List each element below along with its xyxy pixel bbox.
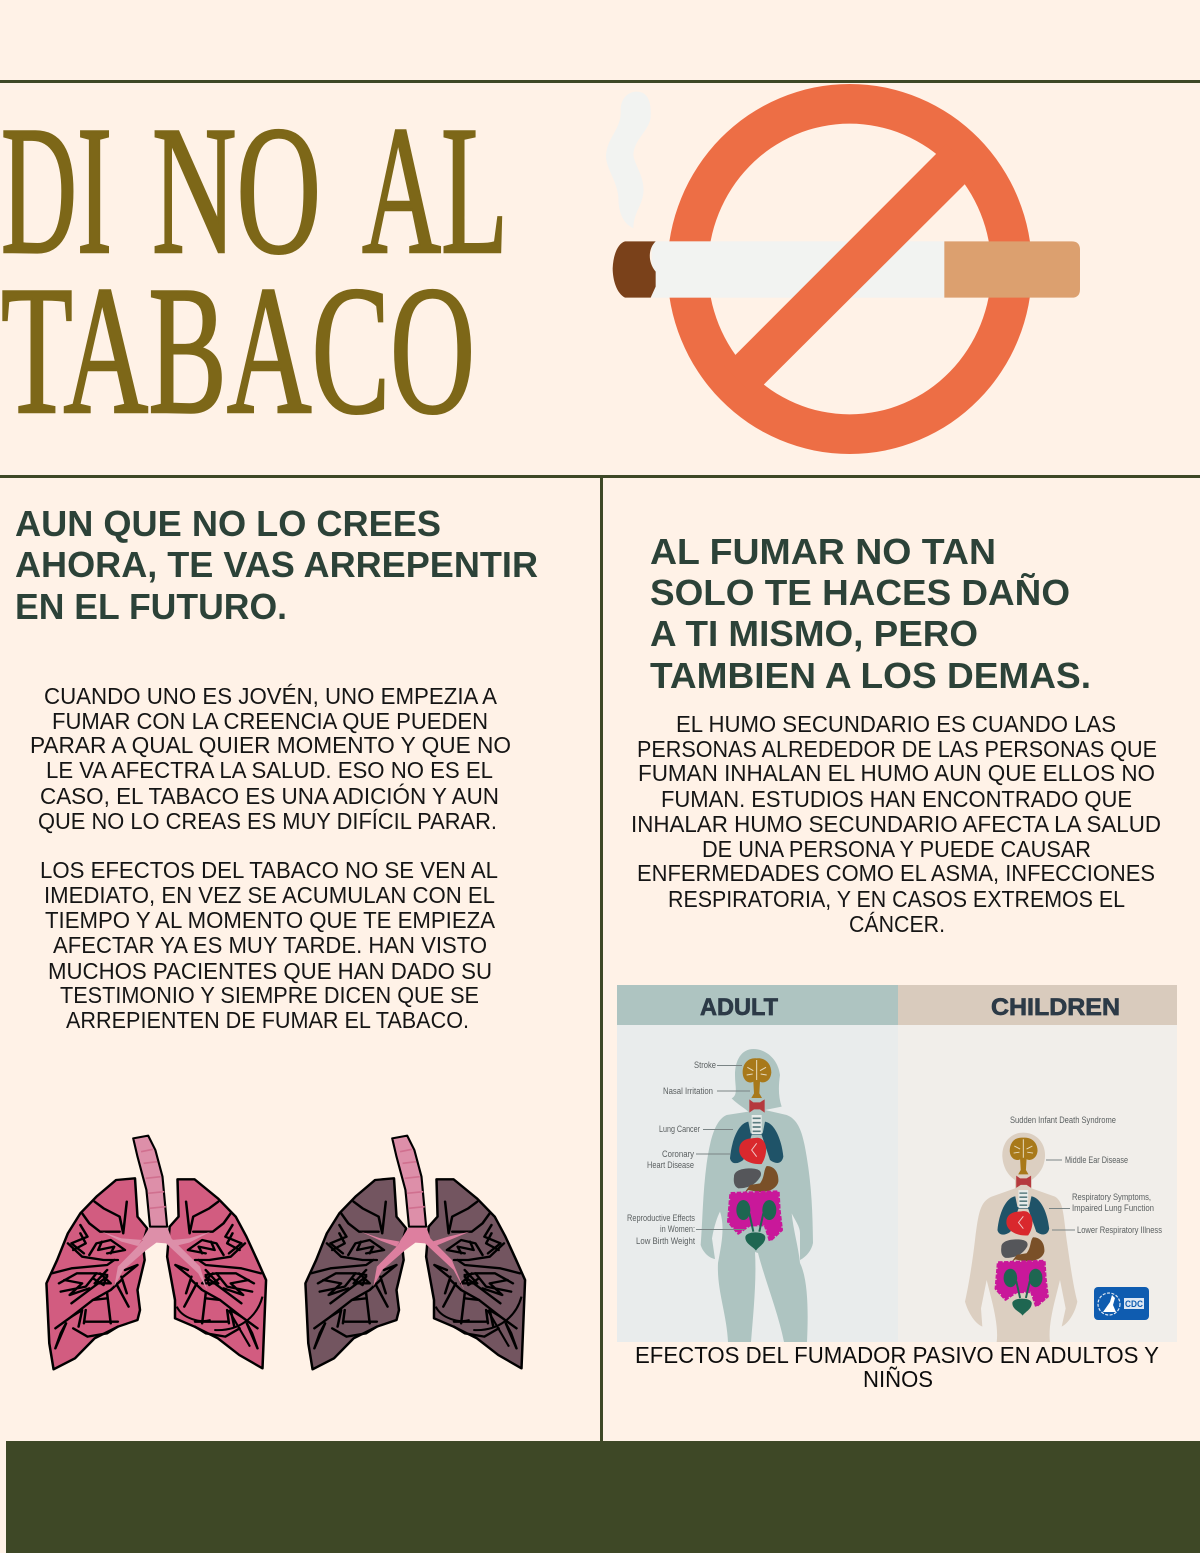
text block: second paragraph: AFECTAR YA ES MUY TARDE. HAN VISTO <box>53 932 487 958</box>
title <box>1 88 508 452</box>
icon: cigarette filter <box>944 241 1080 298</box>
chart: adult panel <box>617 985 898 1342</box>
trachea <box>133 1136 167 1227</box>
children panel title: CHILDREN <box>991 994 1120 1021</box>
text block: first paragraph: CUANDO UNO ES JOVÉN, UNO EMPEZIA A <box>44 683 498 709</box>
text block: first paragraph: FUMAR CON LA CREENCIA QUE PUEDEN <box>52 708 488 734</box>
heading: left column: AHORA, TE VAS ARREPENTIR <box>15 544 538 585</box>
text block: second-hand smoke: ENFERMEDADES COMO EL ASMA, INFECCIONES <box>637 860 1155 886</box>
text block: second-hand smoke: INHALAR HUMO SECUNDARIO AFECTA LA SALUD <box>631 811 1161 837</box>
text block: second paragraph <box>40 857 498 1033</box>
header top rule <box>0 80 1200 83</box>
adult panel header <box>617 985 898 1025</box>
child labels: Impaired Lung Function <box>1072 1203 1154 1213</box>
title: DI <box>1 88 112 292</box>
text block: second-hand smoke: FUMAN INHALAN EL HUMO AUN QUE ELLOS NO <box>638 760 1155 786</box>
adult labels: Coronary <box>662 1149 694 1159</box>
text block: first paragraph: PARAR A QUAL QUIER MOMENTO Y QUE NO <box>30 732 511 758</box>
text block: second-hand smoke: PERSONAS ALREDEDOR DE LAS PERSONAS QUE <box>637 736 1157 762</box>
adult labels: Reproductive Effects <box>627 1213 695 1223</box>
text block: second paragraph: MUCHOS PACIENTES QUE HAN DADO SU <box>48 958 492 984</box>
title: NO <box>152 88 321 292</box>
heading: right column: A TI MISMO, PERO <box>650 613 978 654</box>
text block: second paragraph: IMEDIATO, EN VEZ SE ACUMULAN CON EL <box>44 882 495 908</box>
adult panel background <box>617 1025 898 1342</box>
heading: right column: TAMBIEN A LOS DEMAS. <box>650 655 1091 696</box>
icon: prohibition ring <box>667 84 1032 454</box>
footer band <box>6 1441 1200 1553</box>
icon: prohibition bar <box>724 144 976 395</box>
icon: no smoking sign <box>606 84 1080 454</box>
heading: left column <box>15 503 538 627</box>
title: TABACO <box>1 248 475 452</box>
child labels: Lower Respiratory Illness <box>1077 1225 1162 1235</box>
header bottom rule <box>0 475 1200 478</box>
title: AL <box>362 88 508 292</box>
text block: second-hand smoke: CÁNCER. <box>849 911 945 937</box>
heading: left column: EN EL FUTURO. <box>15 586 287 627</box>
text block: second paragraph: TESTIMONIO Y SIEMPRE DICEN QUE SE <box>60 982 479 1008</box>
adult labels: Heart Disease <box>647 1160 694 1170</box>
caption: EFECTOS DEL FUMADOR PASIVO EN ADULTOS Y <box>635 1342 1159 1368</box>
bronchi <box>102 1227 211 1290</box>
caption <box>635 1342 1159 1392</box>
text block: second paragraph: LOS EFECTOS DEL TABACO NO SE VEN AL <box>40 857 498 883</box>
heading: right column <box>650 531 1091 696</box>
adult organs <box>728 1058 783 1251</box>
icon: smoker lungs <box>305 1136 525 1369</box>
icon: cigarette ember <box>613 241 656 298</box>
text block: first paragraph: LE VA AFECTRA LA SALUD. ESO NO ES EL <box>46 757 493 783</box>
chart: children panel <box>898 985 1177 1342</box>
adult panel title: ADULT <box>700 994 778 1021</box>
child organs <box>996 1138 1049 1316</box>
child silhouette <box>965 1133 1077 1342</box>
icon: CDC logo <box>1094 1287 1149 1320</box>
column divider <box>600 478 603 1441</box>
text block: second paragraph: TIEMPO Y AL MOMENTO QUE TE EMPIEZA <box>45 907 496 933</box>
adult leader lines <box>696 1066 750 1230</box>
text block: second-hand smoke <box>631 711 1161 937</box>
bronchi <box>361 1227 470 1290</box>
icon: CDC logo: CDC <box>1125 1299 1143 1309</box>
text block: first paragraph: QUE NO LO CREAS ES MUY DIFÍCIL PARAR. <box>38 808 497 834</box>
heading: right column: SOLO TE HACES DAÑO <box>650 571 1070 613</box>
text block: first paragraph <box>30 683 511 834</box>
child labels <box>1010 1115 1162 1235</box>
adult labels: Low Birth Weight <box>636 1236 695 1246</box>
heading: right column: AL FUMAR NO TAN <box>650 531 996 572</box>
child labels: Sudden Infant Death Syndrome <box>1010 1115 1116 1125</box>
adult labels <box>627 1060 716 1246</box>
children panel background <box>898 1025 1177 1342</box>
child labels: Respiratory Symptoms, <box>1072 1192 1151 1202</box>
adult labels: Nasal Irritation <box>663 1086 713 1096</box>
icon: smoke <box>606 92 651 228</box>
adult silhouette <box>701 1049 813 1342</box>
text block: second-hand smoke: RESPIRATORIA, Y EN CASOS EXTREMOS EL <box>668 886 1125 912</box>
text block: second-hand smoke: EL HUMO SECUNDARIO ES CUANDO LAS <box>676 711 1116 737</box>
text block: first paragraph: CASO, EL TABACO ES UNA ADICIÓN Y AUN <box>40 783 499 809</box>
heading: left column: AUN QUE NO LO CREES <box>15 503 441 544</box>
child labels: Middle Ear Disease <box>1065 1155 1128 1165</box>
adult labels: in Women: <box>660 1224 695 1234</box>
text block: second paragraph: ARREPIENTEN DE FUMAR EL TABACO. <box>66 1007 469 1033</box>
trachea <box>392 1136 426 1227</box>
adult labels: Stroke <box>694 1060 716 1070</box>
icon: cigarette paper <box>652 241 945 298</box>
text block: second-hand smoke: DE UNA PERSONA Y PUEDE CAUSAR <box>702 836 1091 862</box>
icon: healthy lungs <box>46 1136 266 1369</box>
child leader lines <box>1046 1160 1075 1230</box>
adult labels: Lung Cancer <box>659 1124 700 1134</box>
text block: second-hand smoke: FUMAN. ESTUDIOS HAN ENCONTRADO QUE <box>661 786 1132 812</box>
caption: NIÑOS <box>863 1366 933 1392</box>
children panel header <box>898 985 1177 1025</box>
